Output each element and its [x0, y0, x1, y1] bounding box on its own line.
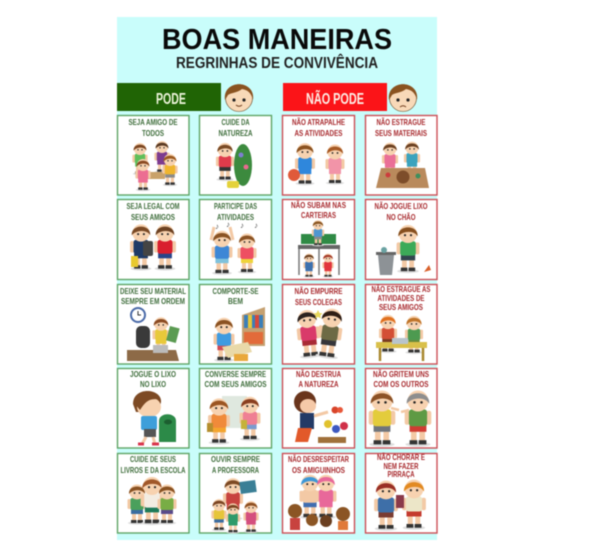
card: nao empurre seus colegas: NÃO EMPURRE: [294, 286, 343, 296]
icon: children singing: ♪: [254, 221, 258, 230]
icon: children in swimsuits: [288, 475, 350, 530]
card: ouvir sempre a professora: OUVIR SEMPRE: [211, 455, 260, 464]
icon: sad face: [389, 84, 417, 112]
card: nao estrague as atividades de seus amigos: ATIVIDADES DE: [378, 294, 425, 303]
subtitle: REGRINHAS DE CONVIVÊNCIA: [176, 54, 378, 72]
icon: children arguing: [374, 480, 426, 531]
card: seja legal com seus amigos: SEJA LEGAL COM: [126, 202, 180, 211]
card: deixe seu material sempre em ordem: DEIXE SEU MATERIAL: [120, 287, 186, 296]
card: nao empurre seus colegas: [282, 284, 354, 364]
card: nao desrespeitar os amiguinhos: OS AMIGUINHOS: [292, 466, 345, 475]
card: participe das atividades: ATIVIDADES: [217, 213, 254, 222]
card: nao estrague seus materiais: [366, 116, 437, 195]
card: nao destrua a natureza: NÃO DESTRUA: [296, 369, 341, 379]
card: nao desrespeitar os amiguinhos: NÃO DESRESPEITAR: [288, 454, 349, 464]
card: nao chorar e nem fazer pirraca: NEM FAZER: [384, 462, 419, 471]
card: jogue o lixo no lixo: JOGUE O LIXO: [130, 370, 176, 379]
card: nao estrague seus materiais: NÃO ESTRAGUE: [376, 117, 426, 127]
card: cuide da natureza: [200, 116, 272, 195]
icon: child using green bin: [133, 391, 176, 444]
icon: children at table: [376, 142, 429, 188]
icon: teacher with children: [211, 478, 259, 533]
icon: child on school desks: [298, 220, 340, 278]
title: BOAS MANEIRAS: [162, 24, 392, 56]
card: nao destrua a natureza: A NATUREZA: [298, 380, 339, 389]
card: nao subam nas carteiras: [282, 200, 354, 280]
card: nao gritem uns com os outros: [366, 368, 437, 448]
card: nao estrague as atividades de seus amigos: NÃO ESTRAGUE AS: [372, 284, 431, 294]
card: nao jogue lixo no chao: NÃO JOGUE LIXO: [374, 201, 428, 211]
card: cuide de seus livros e da escola: CUIDE DE SEUS: [130, 455, 176, 464]
icon: children singing: ♪: [226, 220, 230, 229]
card: nao chorar e nem fazer pirraca: [366, 452, 437, 533]
card: converse sempre com seus amigos: CONVERSE SEMPRE: [205, 370, 266, 379]
card: nao estrague seus materiais: SEUS MATERIAIS: [375, 129, 427, 138]
icon: children singing: ♪: [240, 221, 244, 230]
card: jogue o lixo no lixo: [118, 368, 189, 448]
card: nao empurre seus colegas: SEUS COLEGAS: [295, 298, 342, 307]
card: nao chorar e nem fazer pirraca: NÃO CHORAR E: [377, 452, 425, 462]
card: ouvir sempre a professora: [200, 454, 272, 533]
card: nao jogue lixo no chao: [366, 200, 437, 280]
icon: children with backpacks: [130, 224, 176, 270]
card: nao subam nas carteiras: NÃO SUBAM NAS: [291, 200, 346, 210]
card: deixe seu material sempre em ordem: [118, 284, 189, 364]
icon: happy face: [225, 84, 253, 112]
icon: children pushing: [295, 307, 345, 360]
icon: child trampling flowers: [294, 391, 348, 443]
header: nao pode: NÃO PODE: [306, 90, 364, 108]
card: comporte-se bem: [200, 284, 272, 364]
card: participe das atividades: [200, 200, 272, 280]
card: seja amigo de todos: [118, 116, 189, 195]
icon: child at desk with clock: [127, 308, 180, 361]
card: ouvir sempre a professora: A PROFESSORA: [212, 466, 259, 475]
card: cuide de seus livros e da escola: LIVROS E DA ESCOLA: [120, 466, 186, 475]
card: cuide da natureza: CUIDE DA: [222, 118, 250, 127]
card: nao subam nas carteiras: CARTEIRAS: [301, 211, 336, 220]
card: nao jogue lixo no chao: NO CHÃO: [386, 212, 416, 222]
card: nao gritem uns com os outros: NÃO GRITEM UNS: [373, 369, 429, 379]
card: nao atrapalhe as atividades: NÃO ATRAPALHE: [292, 117, 345, 127]
card: nao estrague as atividades de seus amigos: SEUS AMIGOS: [379, 303, 423, 312]
card: nao destrua a natureza: [282, 368, 354, 448]
icon: children singing: ♪: [215, 222, 219, 231]
poster background: [117, 17, 437, 540]
icon: children at messy table: [376, 315, 427, 361]
card: nao gritem uns com os outros: COM OS OUTROS: [374, 380, 429, 389]
card: converse sempre com seus amigos: COM SEUS AMIGOS: [204, 380, 267, 389]
card: cuide de seus livros e da escola: [118, 454, 189, 533]
card: comporte-se bem: BEM: [228, 297, 243, 306]
icon: child littering beside bin: [376, 225, 431, 275]
header: pode: [117, 83, 221, 111]
card: cuide da natureza: NATUREZA: [218, 129, 253, 138]
header: nao pode: [283, 83, 387, 111]
card: converse sempre com seus amigos: [200, 368, 272, 448]
card: seja legal com seus amigos: SEUS AMIGOS: [131, 213, 175, 222]
icon: children singing: [211, 220, 258, 275]
card: participe das atividades: PARTICIPE DAS: [214, 202, 257, 211]
card: seja amigo de todos: TODOS: [142, 129, 164, 138]
icon: children playing: [132, 141, 178, 191]
card: seja legal com seus amigos: [118, 200, 189, 280]
card: nao estrague as atividades de seus amigos: [366, 284, 437, 364]
icon: three children with books: [128, 477, 176, 525]
header: pode: PODE: [156, 91, 186, 108]
card: deixe seu material sempre em ordem: SEMPRE EM ORDEM: [121, 297, 185, 306]
card: seja amigo de todos: SEJA AMIGO DE: [128, 118, 178, 127]
icon: children shouting: [369, 390, 431, 447]
card: nao atrapalhe as atividades: AS ATIVIDADES: [294, 129, 343, 138]
icon: two children: [288, 143, 344, 185]
card: nao desrespeitar os amiguinhos: [282, 454, 354, 533]
icon: child with plant: [216, 143, 252, 188]
card: nao chorar e nem fazer pirraca: PIRRAÇA: [388, 470, 415, 479]
icon: two children talking: [207, 396, 260, 444]
card: jogue o lixo no lixo: NO LIXO: [140, 380, 166, 389]
card: nao atrapalhe as atividades: [282, 116, 354, 195]
card: comporte-se bem: COMPORTE-SE: [212, 287, 259, 296]
icon: child reading by bookshelf: [214, 307, 265, 362]
